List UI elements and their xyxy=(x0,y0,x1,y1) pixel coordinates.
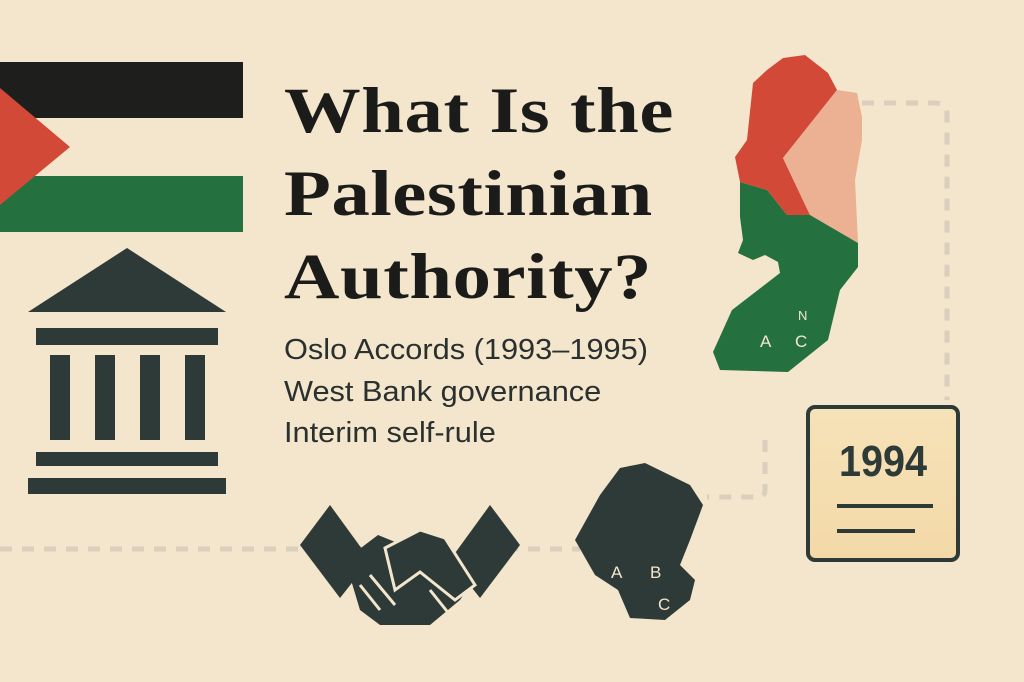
card: 1994 xyxy=(806,405,960,562)
map: West Bank regions: N xyxy=(798,308,807,323)
year: 1994 xyxy=(839,437,927,486)
subtitle list: Oslo Accords (1993–1995) xyxy=(284,334,648,366)
flag xyxy=(0,62,243,232)
subtitle list xyxy=(284,334,648,449)
map: West Bank regions: C xyxy=(795,332,807,351)
title xyxy=(284,75,674,313)
title: What Is the xyxy=(284,75,674,147)
title: Palestinian xyxy=(284,158,653,230)
map: dark ABC region: C xyxy=(658,595,670,614)
icon: government building xyxy=(28,248,226,494)
map: West Bank regions: A xyxy=(760,332,772,351)
map: West Bank regions xyxy=(713,55,862,372)
map: dark ABC region: B xyxy=(650,563,661,582)
subtitle list: Interim self-rule xyxy=(284,417,496,449)
subtitle list: West Bank governance xyxy=(284,376,601,408)
icon: handshake xyxy=(300,505,520,625)
title: Authority? xyxy=(284,241,652,313)
map: dark ABC region: A xyxy=(611,563,623,582)
map: dark ABC region xyxy=(575,463,703,620)
